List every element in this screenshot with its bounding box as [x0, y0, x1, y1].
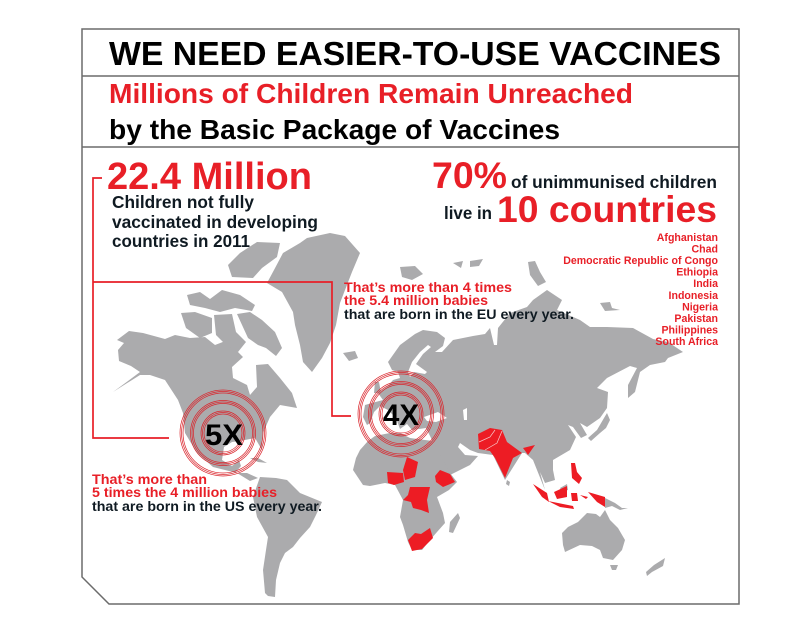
south america — [253, 477, 322, 597]
stat: 22.4 million: countries in 2011 — [112, 231, 250, 251]
5X label: 5X — [205, 419, 243, 452]
greenland — [267, 233, 360, 372]
callout: US comparison: that are born in the US every year. — [92, 499, 322, 515]
country list: Indonesia — [669, 290, 718, 302]
header dividers — [82, 76, 739, 147]
subtitle: Millions of Children Remain Unreached — [109, 77, 633, 109]
south africa — [408, 528, 433, 551]
callout: US comparison: That’s more than — [92, 472, 207, 488]
country list: Afghanistan — [657, 232, 718, 244]
callout: US comparison: 5 times the 4 million babies — [92, 485, 277, 501]
stat: 70 percent: live in — [444, 203, 492, 223]
stat: 22.4 million: 22.4 Million — [107, 156, 312, 198]
frame — [82, 29, 739, 604]
eurasia — [363, 290, 683, 490]
target rings: 5X — [180, 390, 266, 476]
priority countries in red — [387, 428, 605, 551]
stat: 70 percent: of unimmunised children — [511, 172, 717, 192]
north america — [113, 331, 297, 481]
stat: 22.4 million — [107, 156, 318, 251]
philippines — [571, 463, 582, 484]
country borders — [479, 430, 502, 450]
africa — [353, 433, 457, 550]
uk and pacific islands — [374, 259, 665, 576]
country list: Nigeria — [682, 301, 718, 313]
4X label: 4X — [383, 399, 419, 432]
country list: South Africa — [655, 336, 718, 348]
callout: EU comparison: that are born in the EU every year. — [344, 307, 574, 323]
country list — [563, 232, 719, 348]
stat: 70 percent: 70% — [432, 154, 507, 196]
country list: India — [693, 278, 718, 290]
seas — [408, 345, 467, 422]
nigeria — [387, 472, 404, 485]
subtitle — [109, 77, 633, 145]
country list: Pakistan — [674, 313, 718, 325]
country list: Ethiopia — [676, 267, 718, 279]
callout: EU comparison: That’s more than 4 times — [344, 280, 512, 296]
country list: Chad — [692, 244, 718, 256]
ethiopia — [435, 470, 455, 487]
callout: EU comparison — [344, 280, 574, 323]
iceland — [343, 351, 358, 361]
red connector lines — [93, 178, 351, 438]
world map — [113, 233, 683, 597]
stat: 22.4 million: Children not fully — [112, 192, 254, 212]
indonesia — [533, 484, 605, 509]
subtitle: by the Basic Package of Vaccines — [109, 113, 560, 145]
callout: EU comparison: the 5.4 million babies — [344, 293, 488, 309]
bangladesh region — [523, 445, 535, 455]
stat: 70 percent — [432, 154, 717, 230]
drc — [403, 487, 430, 513]
country list: Philippines — [661, 324, 718, 336]
cuba — [250, 458, 267, 463]
stat: 22.4 million: vaccinated in developing — [112, 212, 318, 232]
callout: US comparison — [92, 472, 322, 515]
afghanistan pakistan india — [478, 428, 522, 478]
title: WE NEED EASIER-TO-USE VACCINES — [109, 36, 721, 73]
country list: Democratic Republic of Congo — [563, 255, 719, 267]
stat: 70 percent: 10 countries — [497, 188, 717, 230]
arctic canada islands — [181, 242, 282, 356]
target rings: 4X — [358, 371, 444, 457]
chad — [403, 457, 418, 480]
